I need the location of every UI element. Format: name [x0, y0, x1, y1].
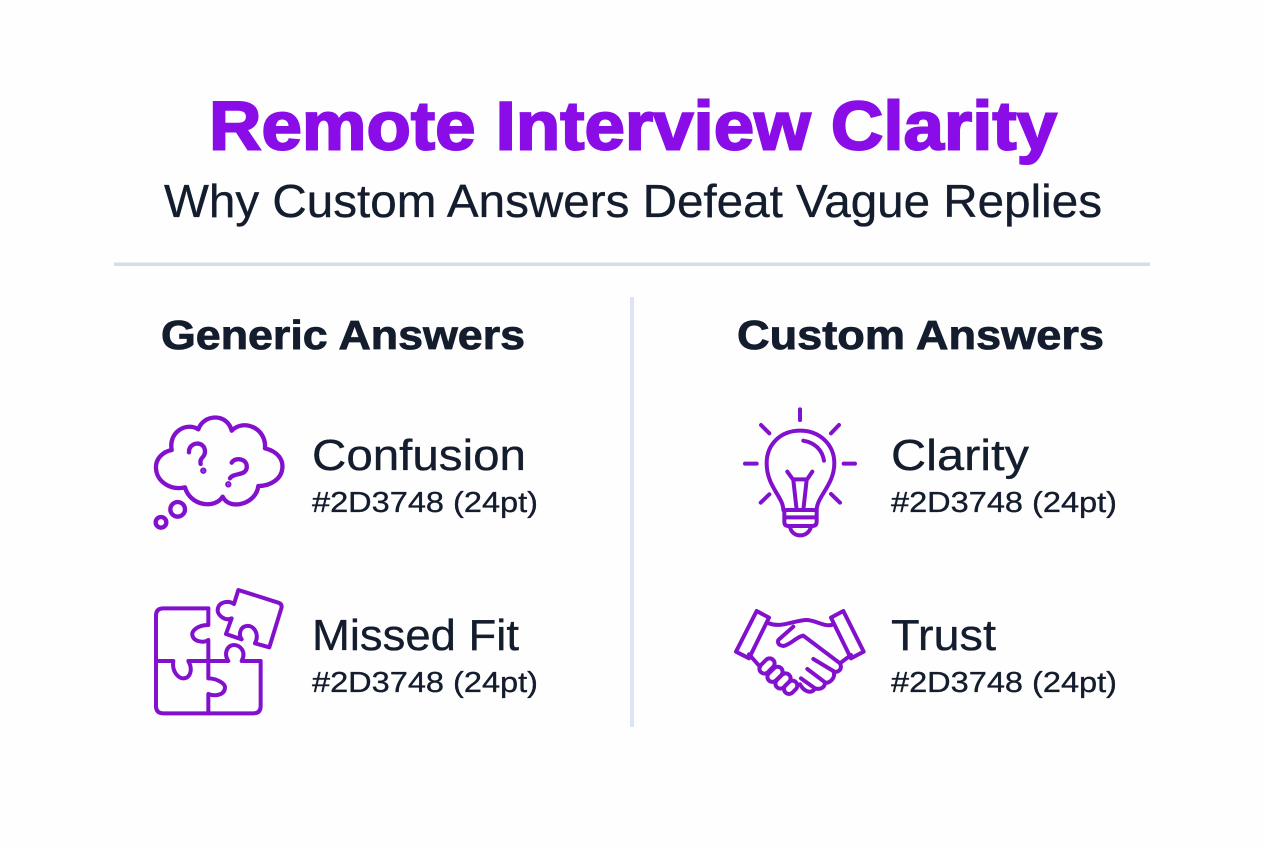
caption: trust: #2D3748 (24pt)	[891, 667, 1117, 699]
subtitle: Why Custom Answers Defeat Vague Replies	[164, 175, 1102, 227]
item: trust	[736, 611, 1117, 699]
label: clarity: Clarity	[891, 431, 1029, 480]
item: missed fit	[156, 590, 538, 713]
item: clarity	[745, 409, 1117, 535]
icon: light bulb	[745, 409, 855, 535]
label: trust: Trust	[891, 611, 996, 660]
label: missed fit: Missed Fit	[312, 611, 519, 660]
heading: custom answers: Custom Answers	[737, 312, 1104, 358]
label: confusion: Confusion	[312, 431, 526, 480]
caption: missed fit: #2D3748 (24pt)	[312, 667, 538, 699]
item: confusion	[156, 417, 538, 528]
heading: generic answers: Generic Answers	[161, 312, 525, 358]
icon: puzzle pieces	[156, 590, 282, 713]
icon: handshake	[736, 611, 864, 696]
caption: clarity: #2D3748 (24pt)	[891, 487, 1117, 519]
caption: confusion: #2D3748 (24pt)	[312, 487, 538, 519]
panel: generic answers	[156, 312, 538, 713]
panel: custom answers	[736, 312, 1117, 699]
icon: thought cloud with question marks	[156, 417, 282, 528]
title: Remote Interview Clarity	[209, 88, 1057, 164]
